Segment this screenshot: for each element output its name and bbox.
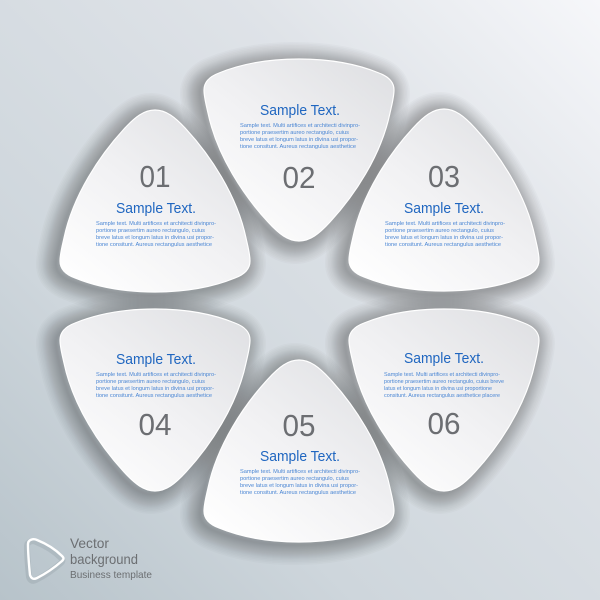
body text 05: Sample text. Multi artifices et architecti divinpro- xyxy=(240,469,360,475)
heading 04: Sample Text. xyxy=(116,352,196,368)
body text 03 xyxy=(385,221,505,248)
panel 01 xyxy=(60,110,250,292)
body text 06: latus et longum latus in divina usi proportione xyxy=(384,386,492,392)
number 06: 06 xyxy=(428,406,460,441)
body text 06 xyxy=(384,372,504,399)
body text 02 xyxy=(240,123,360,150)
body text 02: tione consitunt. Aureus rectangulus aesthetice xyxy=(240,144,356,150)
body text 04 xyxy=(96,372,216,399)
panel 04 xyxy=(60,309,250,491)
body text 03: tione consitunt. Aureus rectangulus aesthetice xyxy=(385,242,501,248)
number 05: 05 xyxy=(282,408,316,443)
body text 05: tione consitunt. Aureus rectangulus aesthetice xyxy=(240,490,356,496)
body text 01: tione consitunt. Aureus rectangulus aesthetice xyxy=(96,242,212,248)
body text 05: portione praesertim aureo rectangulo, cuius xyxy=(240,476,349,482)
number 03: 03 xyxy=(428,159,460,194)
body text 02: portione praesertim aureo rectangulo, cuius xyxy=(240,130,349,136)
heading 05: Sample Text. xyxy=(260,449,340,465)
body text 06: portione praesertim aureo rectangulo, cuius breve xyxy=(384,379,504,385)
number 01: 01 xyxy=(140,159,170,194)
icon: rounded triangle logo xyxy=(27,539,64,581)
body text 04: portione praesertim aureo rectangulo, cuius xyxy=(96,379,205,385)
body text 05: breve latus et longum latus in divina usi propor- xyxy=(240,483,358,489)
panel 05 xyxy=(204,360,394,542)
panel 02 xyxy=(204,59,394,241)
body text 04: Sample text. Multi artifices et architecti divinpro- xyxy=(96,372,216,378)
footer text: Vector xyxy=(70,535,109,551)
heading 03: Sample Text. xyxy=(404,201,484,217)
body text 01: Sample text. Multi artifices et architecti divinpro- xyxy=(96,221,216,227)
body text 02: Sample text. Multi artifices et architecti divinpro- xyxy=(240,123,360,129)
body text 03: portione praesertim aureo rectangulo, cuius xyxy=(385,228,494,234)
body text 05 xyxy=(240,469,360,496)
body text 04: breve latus et longum latus in divina usi propor- xyxy=(96,386,214,392)
body text 04: tione consitunt. Aureus rectangulus aesthetice xyxy=(96,393,212,399)
number 02: 02 xyxy=(282,160,316,195)
footer text xyxy=(70,535,152,581)
number 04: 04 xyxy=(138,407,172,442)
footer text: Business template xyxy=(70,569,152,581)
panel 06 xyxy=(349,309,539,491)
panel 03 xyxy=(349,109,539,291)
body text 03: Sample text. Multi artifices et architecti divinpro- xyxy=(385,221,505,227)
heading 02: Sample Text. xyxy=(260,103,340,119)
footer text: background xyxy=(70,551,138,567)
card shadows xyxy=(56,62,535,545)
body text 01: breve latus et longum latus in divina usi propor- xyxy=(96,235,214,241)
heading 06: Sample Text. xyxy=(404,351,484,367)
body text 01: portione praesertim aureo rectangulo, cuius xyxy=(96,228,205,234)
body text 01 xyxy=(96,221,216,248)
body text 06: Sample text. Multi artifices et architecti divinpro- xyxy=(384,372,500,378)
body text 02: breve latus et longum latus in divina usi propor- xyxy=(240,137,358,143)
body text 03: breve latus et longum latus in divina usi propor- xyxy=(385,235,503,241)
body text 06: consitunt. Aureus rectangulus aesthetice placere xyxy=(384,393,500,399)
heading 01: Sample Text. xyxy=(116,201,196,217)
